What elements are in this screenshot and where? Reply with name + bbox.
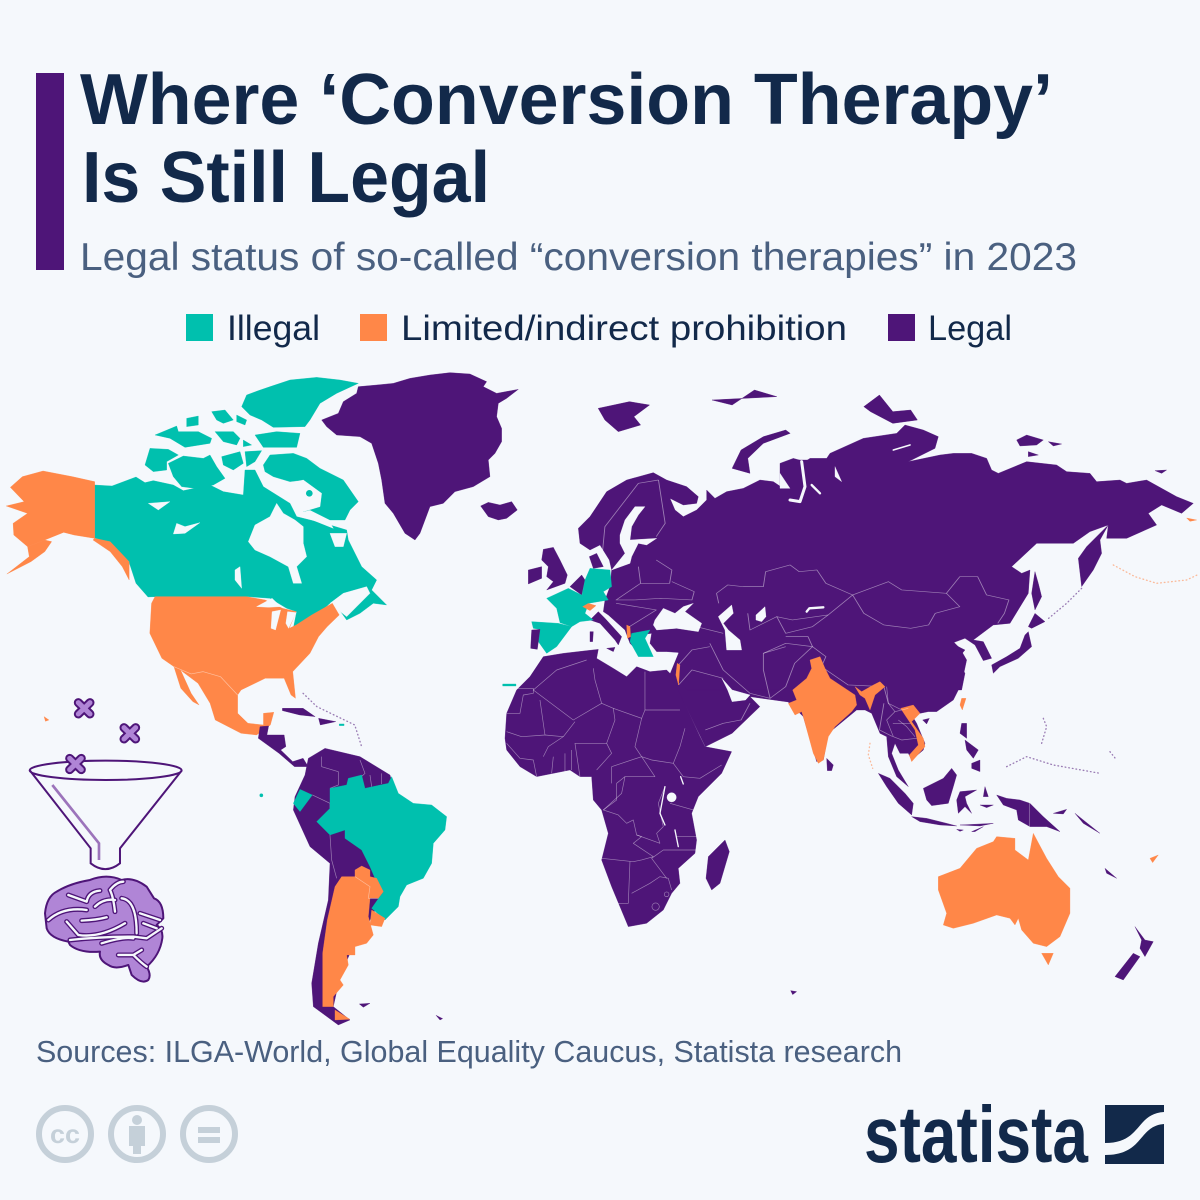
canada arctic islands [145, 377, 358, 520]
hispaniola [319, 718, 336, 725]
persian gulf [722, 678, 750, 702]
middle east land [670, 603, 812, 747]
albania [627, 625, 631, 638]
legend [186, 309, 1012, 348]
canada mainland [95, 470, 387, 628]
denmark [589, 553, 603, 568]
spain [532, 622, 572, 653]
legend item: illegal: Illegal [227, 309, 320, 348]
fiji [1150, 855, 1158, 863]
hawaii [44, 717, 49, 721]
germany [582, 568, 612, 603]
us mexico border [174, 667, 238, 695]
madagascar [706, 840, 729, 890]
icon: cc: cc [50, 1119, 80, 1149]
russian and japanese islands [992, 435, 1167, 673]
africa borders [507, 660, 722, 910]
taiwan [960, 698, 966, 710]
new caledonia [1105, 868, 1117, 878]
greece [630, 630, 653, 657]
united states [150, 597, 339, 698]
title: Is Still Legal [82, 138, 490, 218]
canary islands [503, 684, 516, 686]
brain shape [45, 877, 163, 982]
uruguay [370, 910, 385, 927]
subtitle: Legal status of so-called “conversion therapies” in 2023 [80, 236, 1077, 279]
icon: cc [39, 1108, 91, 1160]
france [547, 588, 593, 627]
tasmania [1042, 953, 1053, 965]
sicily [607, 647, 615, 652]
south america base [293, 748, 393, 1025]
western europe [528, 547, 653, 657]
canada and greenland [95, 373, 518, 628]
kara sea inlets and lake balkhash [780, 445, 910, 612]
south america and africa [260, 649, 732, 1025]
arctic russian islands [598, 390, 917, 473]
rift lakes [660, 777, 683, 847]
pacific island chains [1007, 718, 1117, 773]
united kingdom [542, 547, 567, 590]
statista wordmark: statista [864, 1090, 1088, 1179]
funnel highlight [52, 785, 99, 860]
sardinia and corsica [590, 632, 593, 642]
creative commons icons [39, 1108, 235, 1160]
switzerland [583, 603, 596, 611]
icon: attribution person [111, 1108, 163, 1160]
southeast asian borders [887, 687, 952, 790]
central america [258, 726, 308, 767]
chukotka tip [1187, 518, 1197, 521]
africa [505, 649, 732, 927]
south and southeast asia details [788, 657, 1117, 833]
greenland [322, 373, 518, 540]
black sea [653, 603, 702, 632]
northeast india [855, 682, 885, 710]
hudson bay and canadian lakes [148, 480, 370, 617]
puerto rico [339, 724, 344, 726]
legend item: illegal [186, 309, 320, 348]
pacific russia and japan [992, 435, 1199, 673]
alaska, usa, mexico, caribbean [6, 471, 362, 767]
kuril islands [1047, 588, 1082, 620]
indonesia, malaysia, philippines and neighbours [827, 718, 1100, 833]
cuba [282, 708, 315, 717]
tierra del fuego [335, 1010, 350, 1020]
argentina and paraguay [323, 866, 383, 1007]
iceland [481, 502, 517, 520]
india [788, 657, 857, 763]
argentina paraguay border [355, 877, 378, 898]
great lakes [257, 598, 296, 630]
western russia and europe land [578, 460, 810, 690]
lake victoria [667, 793, 676, 802]
portugal [531, 629, 540, 649]
aleutian islands [1113, 565, 1199, 583]
south america borders [312, 757, 382, 878]
south and southeast asia land [780, 640, 967, 787]
south georgia [436, 1015, 443, 1020]
falkland islands [359, 1003, 370, 1007]
eurasian inland seas [612, 507, 766, 650]
galapagos [260, 794, 263, 797]
world map [6, 373, 1199, 1025]
icon: no derivatives [183, 1108, 235, 1160]
israel [676, 663, 680, 685]
mexico [179, 668, 274, 735]
alaska [6, 471, 129, 580]
new zealand [1115, 927, 1153, 980]
baja california [174, 667, 199, 705]
title [80, 60, 1053, 218]
caspian sea [718, 605, 742, 650]
kerguelen [791, 991, 797, 995]
madagascar, australia and new zealand [706, 833, 1158, 995]
lesser antilles [303, 693, 362, 747]
funnel and brain illustration [30, 703, 182, 982]
funnel [30, 761, 182, 869]
eastern russia, china and korea land [780, 425, 1193, 690]
title: Where ‘Conversion Therapy’ [80, 60, 1053, 140]
papua border [1028, 802, 1030, 827]
title accent bar [36, 73, 64, 270]
statista logo [864, 1090, 1164, 1179]
ireland [528, 567, 542, 584]
baltic sea [612, 507, 657, 570]
brain folds [48, 882, 162, 967]
brazil [317, 775, 447, 920]
filtered x marks [70, 703, 136, 770]
ecuador [293, 789, 312, 812]
statista mark [1105, 1105, 1164, 1164]
asia borders [603, 480, 1009, 740]
vietnam [901, 705, 925, 762]
brain [45, 877, 163, 982]
australia [938, 833, 1070, 947]
italy [590, 612, 622, 645]
aral sea [756, 607, 766, 622]
source note: Sources: ILGA-World, Global Equality Caucus, Statista research [36, 1034, 902, 1069]
andaman islands [868, 743, 873, 768]
legend item: legal [888, 309, 1012, 348]
benelux [570, 575, 585, 595]
legend item: limited/indirect prohibition: Limited/indirect prohibition [401, 309, 847, 348]
legend item: legal: Legal [928, 309, 1012, 348]
